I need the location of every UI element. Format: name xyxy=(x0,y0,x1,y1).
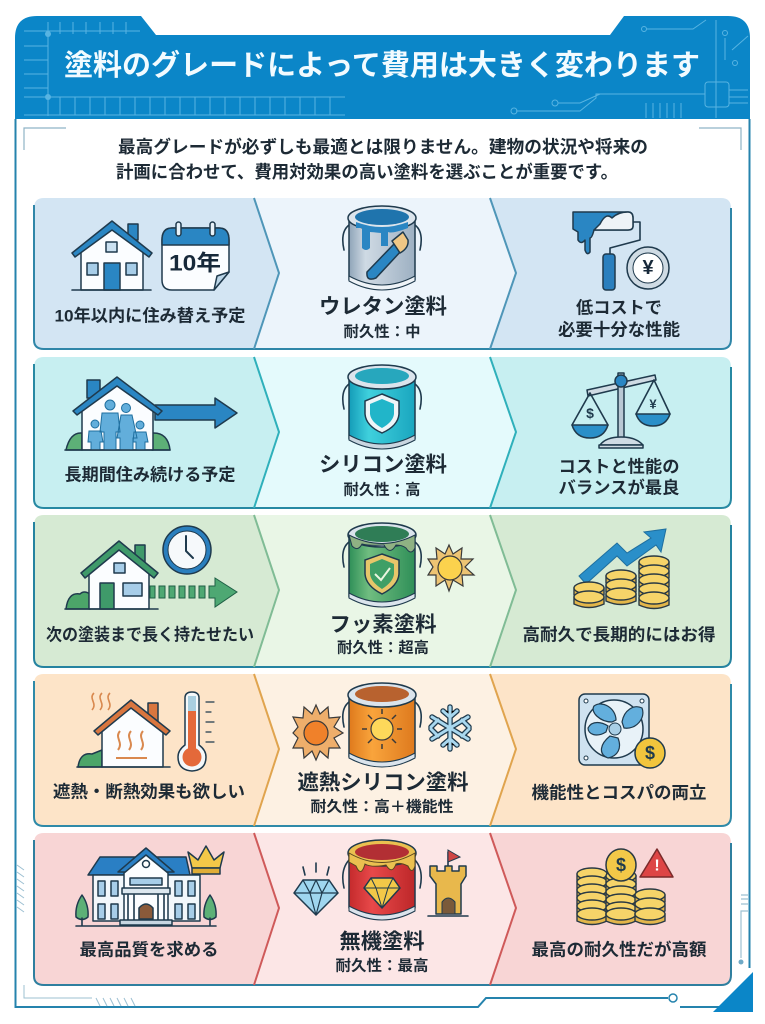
intro text: 最高グレードが必ずしも最適とは限りません。建物の状況や将来の xyxy=(118,137,648,157)
label: situation: 最高品質を求める xyxy=(80,940,218,960)
icon: mansion with crown xyxy=(76,846,224,926)
panel: row 4 heat-shield silicone xyxy=(34,674,731,826)
title: 塗料のグレードによって費用は大きく変わります xyxy=(64,49,700,82)
icon: house with heat and thermometer xyxy=(77,692,214,771)
paint name: フッ素塗料 xyxy=(330,614,436,636)
result text: バランスが最良 xyxy=(558,478,680,498)
panel: row 3 fluorine xyxy=(34,515,731,667)
icon: balance scale: $ xyxy=(586,405,594,421)
result text xyxy=(558,456,680,498)
panel: row 1 urethane xyxy=(34,198,731,349)
icon: calendar 10 years xyxy=(162,222,229,290)
durability: 耐久性：高 xyxy=(344,480,420,498)
icon: balance scale: ¥ xyxy=(649,396,657,412)
icon: house xyxy=(72,221,152,290)
panel: row 2 silicone xyxy=(34,357,731,508)
durability: 耐久性：最高 xyxy=(336,956,428,974)
intro text xyxy=(116,137,648,182)
icon: tall coin stacks with warning: $ xyxy=(616,855,626,875)
durability: 耐久性：高＋機能性 xyxy=(310,798,454,816)
icon: fan with dollar coin xyxy=(579,694,665,768)
icon: paint can with shield xyxy=(343,365,421,449)
result text: コストと性能の xyxy=(558,456,680,476)
header banner xyxy=(15,16,750,119)
durability: 耐久性：超高 xyxy=(337,638,429,656)
result text: 機能性とコスパの両立 xyxy=(532,782,706,802)
icon: paint roller and yen coin xyxy=(573,212,669,290)
label: situation: 長期間住み続ける予定 xyxy=(64,466,236,484)
icon: calendar 10 years: 10年 xyxy=(169,250,221,276)
icon: paint can with diamond and castle xyxy=(294,840,468,920)
label: situation: 次の塗装まで長く持たせたい xyxy=(46,626,254,644)
label: situation: 遮熱・断熱効果も欲しい xyxy=(53,782,245,802)
result text: 必要十分な性能 xyxy=(558,320,680,340)
icon: tall coin stacks with warning xyxy=(577,849,673,924)
durability: 耐久性：中 xyxy=(344,322,420,340)
paint name: ウレタン塗料 xyxy=(319,296,447,318)
result text: 最高の耐久性だが高額 xyxy=(532,940,706,960)
result text xyxy=(558,298,680,340)
icon: coin stacks with rising arrow xyxy=(574,529,669,608)
panel: row 5 inorganic xyxy=(34,833,731,985)
result text: 高耐久で長期的にはお得 xyxy=(522,624,716,644)
paint name: シリコン塗料 xyxy=(319,454,447,476)
icon: fan with dollar coin: $ xyxy=(645,743,655,763)
intro text: 計画に合わせて、費用対効果の高い塗料を選ぶことが重要です。 xyxy=(116,162,618,182)
icon: paint roller and yen coin: ¥ xyxy=(642,257,654,279)
icon: house with clock and dashed arrow xyxy=(65,526,237,609)
label: situation: 10年以内に住み替え予定 xyxy=(54,306,246,326)
paint name: 無機塗料 xyxy=(340,930,424,954)
icon: family house with arrow xyxy=(65,377,237,450)
icon: paint can with shield and sun xyxy=(343,523,474,607)
icon: balance scale xyxy=(572,373,670,448)
icon: paint can with sun and snowflake xyxy=(293,683,469,767)
icon: tall coin stacks with warning: ! xyxy=(654,858,660,874)
icon: paint can with brush xyxy=(343,206,421,290)
paint name: 遮熱シリコン塗料 xyxy=(298,772,468,794)
result text: 低コストで xyxy=(576,298,662,318)
